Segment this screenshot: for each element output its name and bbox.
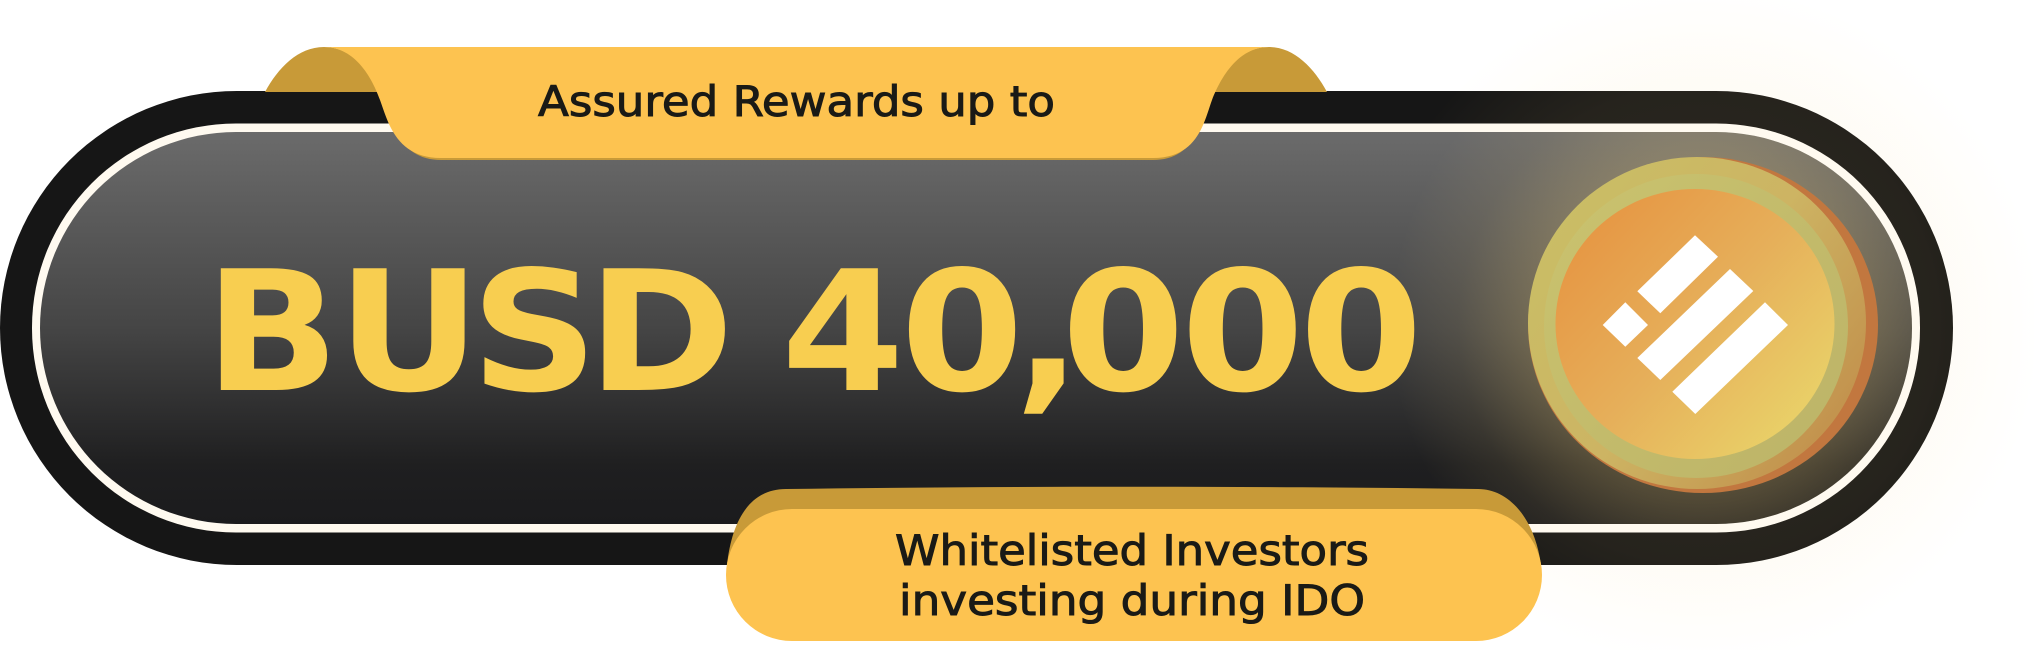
outer pill coin glow — [0, 91, 1953, 565]
banner back fold — [727, 487, 1541, 565]
ribbon text: Assured Rewards up to — [538, 77, 1055, 126]
coin rim — [1528, 157, 1866, 489]
background glow — [1300, 0, 2034, 650]
icon: BUSD coin — [1528, 157, 1878, 493]
coin bronze edge — [1528, 157, 1878, 493]
BUSD logo — [1603, 235, 1788, 414]
coin face — [1556, 189, 1834, 459]
white ring — [32, 124, 1920, 532]
ribbon lower edge — [396, 130, 1197, 160]
inner gradient panel — [40, 132, 1912, 524]
left fold — [265, 47, 378, 92]
line 2: investing during IDO — [899, 576, 1365, 625]
banner body — [726, 509, 1542, 641]
ribbon: top banner — [265, 47, 1327, 160]
amount: 40,000: 40,000 — [781, 235, 1423, 430]
banner text — [895, 526, 1369, 625]
right fold — [1213, 47, 1327, 92]
line 1: Whitelisted Investors — [895, 526, 1369, 575]
ribbon: bottom banner — [726, 487, 1542, 641]
heading: BUSD 40,000 — [205, 235, 1423, 430]
coin inner ring — [1544, 174, 1848, 478]
badge: dark pill — [0, 91, 1953, 565]
inner panel coin glow — [40, 132, 1912, 524]
word: BUSD: BUSD — [205, 235, 734, 430]
ribbon body — [324, 47, 1269, 158]
outer black pill — [0, 91, 1953, 565]
